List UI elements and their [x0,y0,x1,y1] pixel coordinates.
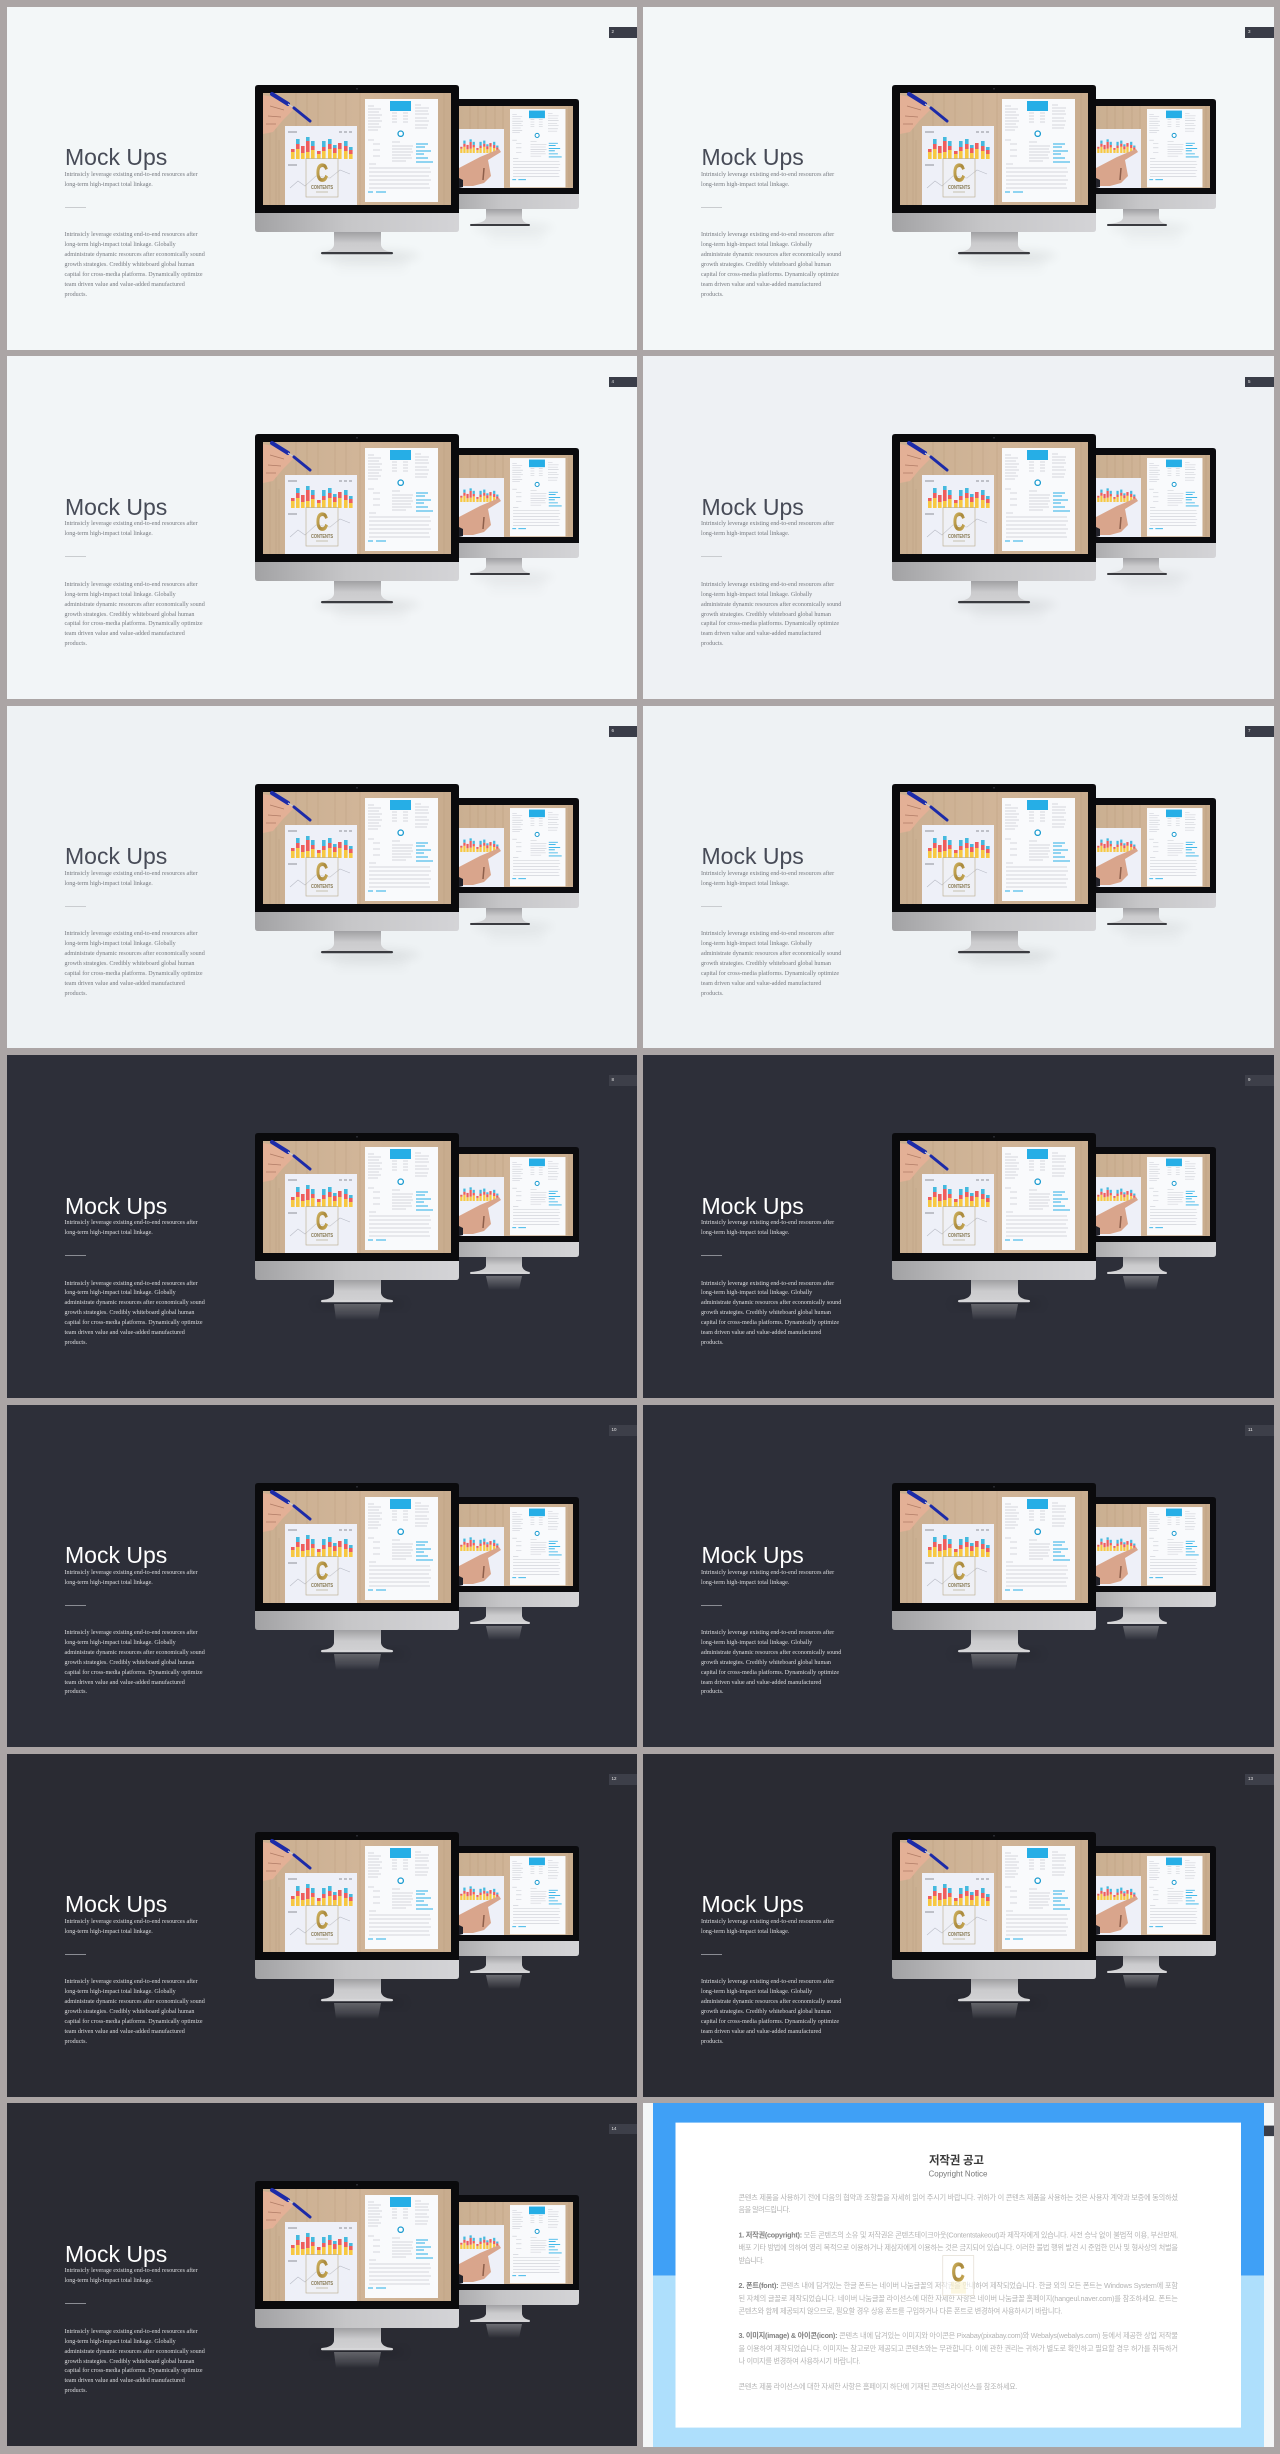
body text: capital for cross-media platforms. Dynamically optimize [701,2019,839,2025]
short divider [701,1255,722,1256]
page number tag [608,726,638,737]
subtitle text [64,1220,198,1236]
body text: administrate dynamic resources after economically sound [701,602,841,608]
body text [701,1978,842,2045]
subtitle text: Intrinsicly leverage existing end-to-end resources after [64,1570,198,1576]
page number tag: 2 [612,29,614,34]
panel: slide 4 mock ups light [6,356,637,699]
subtitle text [701,870,834,887]
heading: Mock Ups [702,1193,804,1219]
subtitle text: Intrinsicly leverage existing end-to-end resources after [701,172,834,178]
page number tag [1245,27,1274,38]
body text: products. [64,991,87,997]
heading: Mock Ups [65,144,167,170]
notice text [739,2193,1178,2391]
page number tag [608,2124,638,2134]
body text: long-term high-impact total linkage. Globally [64,1989,176,1995]
title: Korean: 저작권 공고 [929,2153,984,2167]
body text: products. [64,292,87,298]
body text: long-term high-impact total linkage. Globally [701,592,812,598]
subtitle text [701,172,834,188]
notice text: 2. 폰트(font): 콘텐츠 내에 담겨있는 한글 폰트는 네이버 나눔글꼴의 저작권을 안내하여 제작되었습니다. 한글 외의 모든 폰트는 Windows System에 포함 [739,2281,1178,2290]
body text: team driven value and value-added manufactured [64,981,185,987]
subtitle text: Intrinsicly leverage existing end-to-end resources after [701,1220,834,1226]
body text: Intrinsicly leverage existing end-to-end resources after [701,1979,834,1985]
subtitle text [64,1570,198,1586]
panel: slide 14 mock ups dark [6,2103,637,2446]
notice text: 콘텐츠 제품 라이선스에 대한 자세한 사항은 홈페이지 하단에 기재된 콘텐츠라이선스를 참조하세요. [739,2382,1017,2391]
short divider [701,1954,722,1955]
page number tag [608,377,638,387]
notice text: 을 이용하여 제작되었습니다. 이미지는 참고로만 제공되고 콘텐츠와는 무관합니다. 이에 관한 권리는 귀하가 별도로 확인하고 필요할 경우 허가를 취득하거 [739,2344,1178,2353]
icon: monitor mockups [892,85,1216,266]
heading: Mock Ups [65,494,167,520]
body text: Intrinsicly leverage existing end-to-end resources after [701,1281,834,1287]
notice text: 받습니다. [739,2256,764,2265]
page number tag [608,27,638,38]
subtitle text: Intrinsicly leverage existing end-to-end resources after [64,2268,198,2274]
body text: growth strategies. Credibly whiteboard global human [701,1310,831,1316]
body text: administrate dynamic resources after economically sound [64,1650,205,1656]
body text: growth strategies. Credibly whiteboard global human [64,2009,194,2015]
body text: products. [64,1340,87,1346]
page number tag: 6 [612,728,614,733]
subtitle text: long-term high-impact total linkage. [701,1580,789,1586]
body text: Intrinsicly leverage existing end-to-end resources after [64,2329,198,2335]
subtitle text [64,172,198,188]
subtitle text: long-term high-impact total linkage. [64,182,153,188]
subtitle text [701,1570,834,1586]
panel: slide 8 mock ups dark [6,1055,637,1398]
body text: team driven value and value-added manufactured [64,631,185,637]
page number tag [1245,1774,1274,1785]
page number tag: 3 [1248,29,1251,34]
body text: team driven value and value-added manufactured [64,1680,185,1686]
icon: monitor mockups [892,1133,1216,1318]
body text: team driven value and value-added manufactured [701,282,821,288]
body text: team driven value and value-added manufactured [64,1330,185,1336]
subtitle text [64,870,198,887]
short divider [64,2303,86,2304]
subtitle text [701,520,834,537]
body text [64,232,205,298]
panel: slide 11 mock ups dark [643,1405,1274,1747]
page number tag: 11 [1248,1427,1253,1432]
subtitle text: long-term high-impact total linkage. [64,1929,153,1935]
body text: capital for cross-media platforms. Dynamically optimize [64,971,203,977]
body text: capital for cross-media platforms. Dynamically optimize [701,1320,839,1326]
icon: monitor mockups [255,85,579,266]
icon: monitor mockups [892,784,1216,965]
body text [701,232,842,298]
heading: Mock Ups [702,1891,804,1917]
page number tag [1245,726,1274,737]
panel: slide 12 mock ups dark [6,1754,637,2096]
subtitle text: Intrinsicly leverage existing end-to-end resources after [64,871,198,877]
body text: long-term high-impact total linkage. Globally [64,2339,176,2345]
body text: growth strategies. Credibly whiteboard global human [64,2358,194,2364]
body text: growth strategies. Credibly whiteboard global human [64,1310,194,1316]
notice text: 3. 이미지(image) & 아이콘(icon): 콘텐츠 내에 담겨있는 이미지와 아이콘은 Pixabay(pixabay.com)와 Webalys(webalys.com) 등에서 제공한 상업 저작물 [739,2332,1178,2341]
heading: Mock Ups [65,843,167,869]
page number tag: 13 [1248,1776,1253,1781]
page number tag: 5 [1248,379,1251,384]
body text: capital for cross-media platforms. Dynamically optimize [64,1670,203,1676]
body text: administrate dynamic resources after economically sound [64,1300,205,1306]
subtitle text [701,1220,834,1236]
body text [701,930,842,997]
page number tag: 7 [1248,728,1251,733]
short divider [64,1605,86,1606]
heading: Mock Ups [65,2241,167,2267]
icon: monitor mockups [255,2181,579,2366]
body text: growth strategies. Credibly whiteboard global human [64,262,194,268]
subtitle text: long-term high-impact total linkage. [64,2278,153,2284]
body text: administrate dynamic resources after economically sound [64,1999,205,2005]
notice text: 배포 기타 방법에 의하여 영리 목적으로 이용하거나 제삼자에게 이용하는 것은 금지되어 있습니다. 이러한 불법 행위 발견 시 준엄한 민사 및 형사상의 처벌을 [739,2244,1178,2253]
body text: long-term high-impact total linkage. Globally [701,1989,812,1995]
body text [64,1630,205,1695]
body text: capital for cross-media platforms. Dynamically optimize [64,2368,203,2374]
body text: capital for cross-media platforms. Dynamically optimize [64,1320,203,1326]
body text: products. [701,1689,724,1695]
body text: team driven value and value-added manufactured [64,2378,185,2384]
icon: monitor mockups [892,1832,1216,2017]
body text: products. [64,1689,87,1695]
subtitle text: Intrinsicly leverage existing end-to-end resources after [701,521,834,527]
subtitle text: long-term high-impact total linkage. [701,1230,789,1236]
page number tag: 14 [612,2126,617,2131]
icon: monitor mockups [892,434,1216,615]
notice text: 된 자체의 글꼴로 제작되었습니다. 네이버 나눔글꼴 라이선스에 대한 자세한 사항은 네이버 나눔글꼴 홈페이지(hangeul.naver.com)를 참조하세요. 폰트는 [739,2294,1178,2303]
body text: Intrinsicly leverage existing end-to-end resources after [64,1979,198,1985]
body text: Intrinsicly leverage existing end-to-end resources after [701,931,834,937]
body text [701,582,842,647]
body text: team driven value and value-added manufactured [701,631,821,637]
notice text: 콘텐츠 제품을 사용하기 전에 다음의 협약과 조항들을 자세히 읽어 주시기 바랍니다. 귀하가 이 콘텐츠 제품을 사용하는 것은 사용자 계약과 보증에 동의하셨 [739,2193,1178,2202]
subtitle text [64,2268,198,2284]
body text: capital for cross-media platforms. Dynamically optimize [701,621,839,627]
body text: long-term high-impact total linkage. Globally [701,941,812,947]
subtitle text [701,1918,834,1935]
body text: Intrinsicly leverage existing end-to-end resources after [701,232,834,238]
subtitle text: Intrinsicly leverage existing end-to-end resources after [701,1570,834,1576]
body text: administrate dynamic resources after economically sound [64,951,205,957]
subtitle text: long-term high-impact total linkage. [701,881,789,887]
icon: monitor mockups [892,1483,1216,1668]
body text: capital for cross-media platforms. Dynamically optimize [701,1670,839,1676]
body text: administrate dynamic resources after economically sound [64,252,205,258]
body text: administrate dynamic resources after economically sound [701,1300,841,1306]
panel: copyright notice [643,2103,1274,2447]
panel: slide 3 mock ups light [643,7,1274,350]
page number tag: 4 [612,379,614,384]
subtitle text [64,1918,198,1935]
body text: growth strategies. Credibly whiteboard global human [64,961,194,967]
subtitle text: long-term high-impact total linkage. [64,1230,153,1236]
heading: Mock Ups [702,1542,804,1568]
body text: products. [701,292,724,298]
body text: growth strategies. Credibly whiteboard global human [64,612,194,618]
notice text: 1. 저작권(copyright): 모든 콘텐츠의 소유 및 저작권은 콘텐츠테이크아웃(Contentstakeout)과 제작자에게 있습니다. 사전 승낙 없이 불법적 이용, 부산판재, [739,2231,1178,2240]
body text: team driven value and value-added manufactured [701,1330,821,1336]
panel: slide 5 mock ups light [643,356,1274,699]
page number tag [1245,1425,1274,1436]
page number tag [608,1774,638,1785]
body text [64,1280,205,1346]
page number tag: 8 [612,1077,614,1082]
body text: long-term high-impact total linkage. Globally [64,1640,176,1646]
body text: products. [701,641,724,647]
heading: Mock Ups [702,144,804,170]
body text: long-term high-impact total linkage. Globally [64,242,176,248]
body text: administrate dynamic resources after economically sound [701,951,841,957]
body text: growth strategies. Credibly whiteboard global human [701,1660,831,1666]
icon: monitor mockups [255,434,579,615]
icon: gold C logo [943,2256,974,2296]
body text: team driven value and value-added manufactured [64,2029,185,2035]
subtitle text: long-term high-impact total linkage. [64,1580,153,1586]
body text [701,1280,842,1346]
body text: Intrinsicly leverage existing end-to-end resources after [701,582,834,588]
body text: administrate dynamic resources after economically sound [64,602,205,608]
subtitle text: long-term high-impact total linkage. [64,531,153,537]
subtitle text [64,520,198,537]
body text: products. [701,2039,724,2045]
body text: Intrinsicly leverage existing end-to-end resources after [64,1281,198,1287]
body text: Intrinsicly leverage existing end-to-end resources after [64,582,198,588]
body text: capital for cross-media platforms. Dynamically optimize [701,971,839,977]
body text: long-term high-impact total linkage. Globally [701,1290,812,1296]
body text: team driven value and value-added manufactured [701,2029,821,2035]
body text: capital for cross-media platforms. Dynamically optimize [701,272,839,278]
heading: Mock Ups [65,1891,167,1917]
short divider [701,556,722,557]
subtitle text: Intrinsicly leverage existing end-to-end resources after [701,1919,834,1925]
short divider [701,906,722,907]
page number tag [1245,1075,1274,1086]
body text [64,582,205,647]
body text: team driven value and value-added manufactured [701,981,821,987]
body text: Intrinsicly leverage existing end-to-end resources after [64,1630,198,1636]
body text: administrate dynamic resources after economically sound [701,1999,841,2005]
subtitle text: Intrinsicly leverage existing end-to-end resources after [64,172,198,178]
body text: capital for cross-media platforms. Dynamically optimize [64,2019,203,2025]
panel: slide 7 mock ups light [643,706,1274,1048]
subtitle text: Intrinsicly leverage existing end-to-end resources after [64,1919,198,1925]
short divider [64,1255,86,1256]
body text: capital for cross-media platforms. Dynamically optimize [64,621,203,627]
panel: slide 10 mock ups dark [6,1405,637,1747]
body text: growth strategies. Credibly whiteboard global human [701,2009,831,2015]
heading: Mock Ups [65,1542,167,1568]
panel: slide 6 mock ups light [6,706,637,1048]
body text [701,1630,842,1695]
body text: capital for cross-media platforms. Dynamically optimize [64,272,203,278]
short divider [64,207,86,208]
page number tag: 12 [612,1776,617,1781]
heading: Mock Ups [702,494,804,520]
subtitle text: Intrinsicly leverage existing end-to-end resources after [64,521,198,527]
notice text: 나 이미지를 변경하여 사용하시기 바랍니다. [739,2357,861,2366]
body text: long-term high-impact total linkage. Globally [701,1640,812,1646]
page number tag: 9 [1248,1077,1251,1082]
page number tag [608,1075,638,1086]
body text: growth strategies. Credibly whiteboard global human [701,961,831,967]
body text [64,2328,205,2394]
body text: long-term high-impact total linkage. Globally [701,242,812,248]
icon: gold C logo: C [952,2257,965,2287]
page number tag [1245,377,1274,387]
icon: monitor mockups [255,784,579,965]
icon: monitor mockups [255,1483,579,1668]
body text: long-term high-impact total linkage. Globally [64,941,176,947]
subtitle text: long-term high-impact total linkage. [701,182,789,188]
body text [64,930,205,997]
short divider [701,1605,722,1606]
icon: monitor mockups [255,1133,579,1318]
subtitle text: long-term high-impact total linkage. [701,531,789,537]
panel: slide 2 mock ups light [6,7,637,350]
body text: Intrinsicly leverage existing end-to-end resources after [64,931,198,937]
subtitle: English: Copyright Notice [929,2170,988,2179]
icon: monitor mockups [255,1832,579,2017]
body text: growth strategies. Credibly whiteboard global human [701,612,831,618]
short divider [64,906,86,907]
notice text: 음을 알려드립니다. [739,2206,791,2215]
body text: products. [64,2039,87,2045]
body text: Intrinsicly leverage existing end-to-end resources after [701,1630,834,1636]
body text: long-term high-impact total linkage. Globally [64,1290,176,1296]
short divider [64,1954,86,1955]
panel: slide 9 mock ups dark [643,1055,1274,1398]
page number tag [608,1425,638,1436]
page number tag: 10 [612,1427,617,1432]
body text: growth strategies. Credibly whiteboard global human [701,262,831,268]
body text: team driven value and value-added manufactured [701,1680,821,1686]
body text: products. [64,2388,87,2394]
heading: Mock Ups [65,1193,167,1219]
body text: products. [701,991,724,997]
body text: administrate dynamic resources after economically sound [64,2349,205,2355]
body text: growth strategies. Credibly whiteboard global human [64,1660,194,1666]
short divider [701,207,722,208]
short divider [64,556,86,557]
notice text: 콘텐츠와 함께 제공되지 않으므로, 필요할 경우 상용 폰트를 구입하거나 다른 폰트로 변경하여 사용하시기 바랍니다. [739,2307,1062,2316]
body text: long-term high-impact total linkage. Globally [64,592,176,598]
body text: Intrinsicly leverage existing end-to-end resources after [64,232,198,238]
subtitle text: long-term high-impact total linkage. [64,881,153,887]
subtitle text: Intrinsicly leverage existing end-to-end resources after [64,1220,198,1226]
body text [64,1978,205,2045]
body text: products. [701,1340,724,1346]
body text: administrate dynamic resources after economically sound [701,252,841,258]
body text: products. [64,641,87,647]
body text: administrate dynamic resources after economically sound [701,1650,841,1656]
subtitle text: Intrinsicly leverage existing end-to-end resources after [701,871,834,877]
panel: slide 13 mock ups dark [643,1754,1274,2096]
subtitle text: long-term high-impact total linkage. [701,1929,789,1935]
heading: Mock Ups [702,843,804,869]
body text: team driven value and value-added manufactured [64,282,185,288]
